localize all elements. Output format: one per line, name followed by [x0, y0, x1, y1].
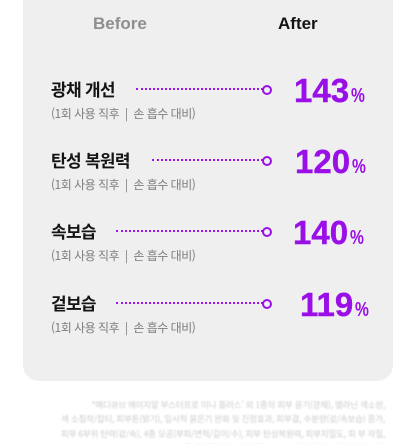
row: gloss improvement — [51, 72, 365, 122]
value 140%: 140 — [293, 214, 348, 251]
ring marker — [262, 156, 272, 166]
row title: 탄성 복원력 — [51, 147, 130, 172]
dotted leader — [152, 159, 263, 161]
row note: (1회 사용 직후 | 손 흡수 대비) — [51, 105, 195, 122]
ring marker — [262, 227, 272, 237]
row title: 광채 개선 — [51, 76, 115, 101]
footnote: 색 소침착/잡티, 피부톤(밝기), 일시적 붉은기 완화 및 진정효과, 피부결, 수분량(겉/속보습) 증가, — [61, 413, 385, 425]
ring marker — [262, 85, 272, 95]
value 119%: % — [355, 299, 369, 321]
value 120%: % — [352, 156, 366, 178]
row note: (1회 사용 직후 | 손 흡수 대비) — [51, 176, 195, 193]
value 119%: 119 — [300, 286, 353, 323]
footnote: 피부 6부위 탄력(겉/속), 4종 모공(부피/면적/길이/수), 피부 탄성복원력, 피부치밀도, 피 부 각질, — [61, 428, 385, 440]
panel: comparison background — [23, 0, 393, 381]
value 120%: 120 — [295, 143, 350, 180]
ring marker — [262, 299, 272, 309]
heading: After: After — [278, 14, 318, 33]
row note: (1회 사용 직후 | 손 흡수 대비) — [51, 247, 195, 264]
heading: Before: Before — [93, 14, 147, 33]
dotted leader — [136, 88, 263, 90]
dotted leader — [116, 230, 263, 232]
row: surface hydration — [51, 286, 369, 336]
row: elasticity recovery — [51, 143, 366, 193]
row note: (1회 사용 직후 | 손 흡수 대비) — [51, 319, 195, 336]
row title: 속보습 — [51, 218, 96, 243]
row: inner hydration — [51, 214, 364, 264]
footnote — [61, 399, 386, 444]
footnote: *메디큐브 에이지알 부스터프로 미니 플러스’ 외 1종의 피부 윤기(광채), 멜라닌 색소량, — [92, 399, 385, 411]
value 143%: % — [351, 85, 365, 107]
dotted leader — [116, 302, 263, 304]
value 140%: % — [350, 227, 364, 249]
row title: 겉보습 — [51, 290, 96, 315]
value 143%: 143 — [294, 72, 349, 109]
